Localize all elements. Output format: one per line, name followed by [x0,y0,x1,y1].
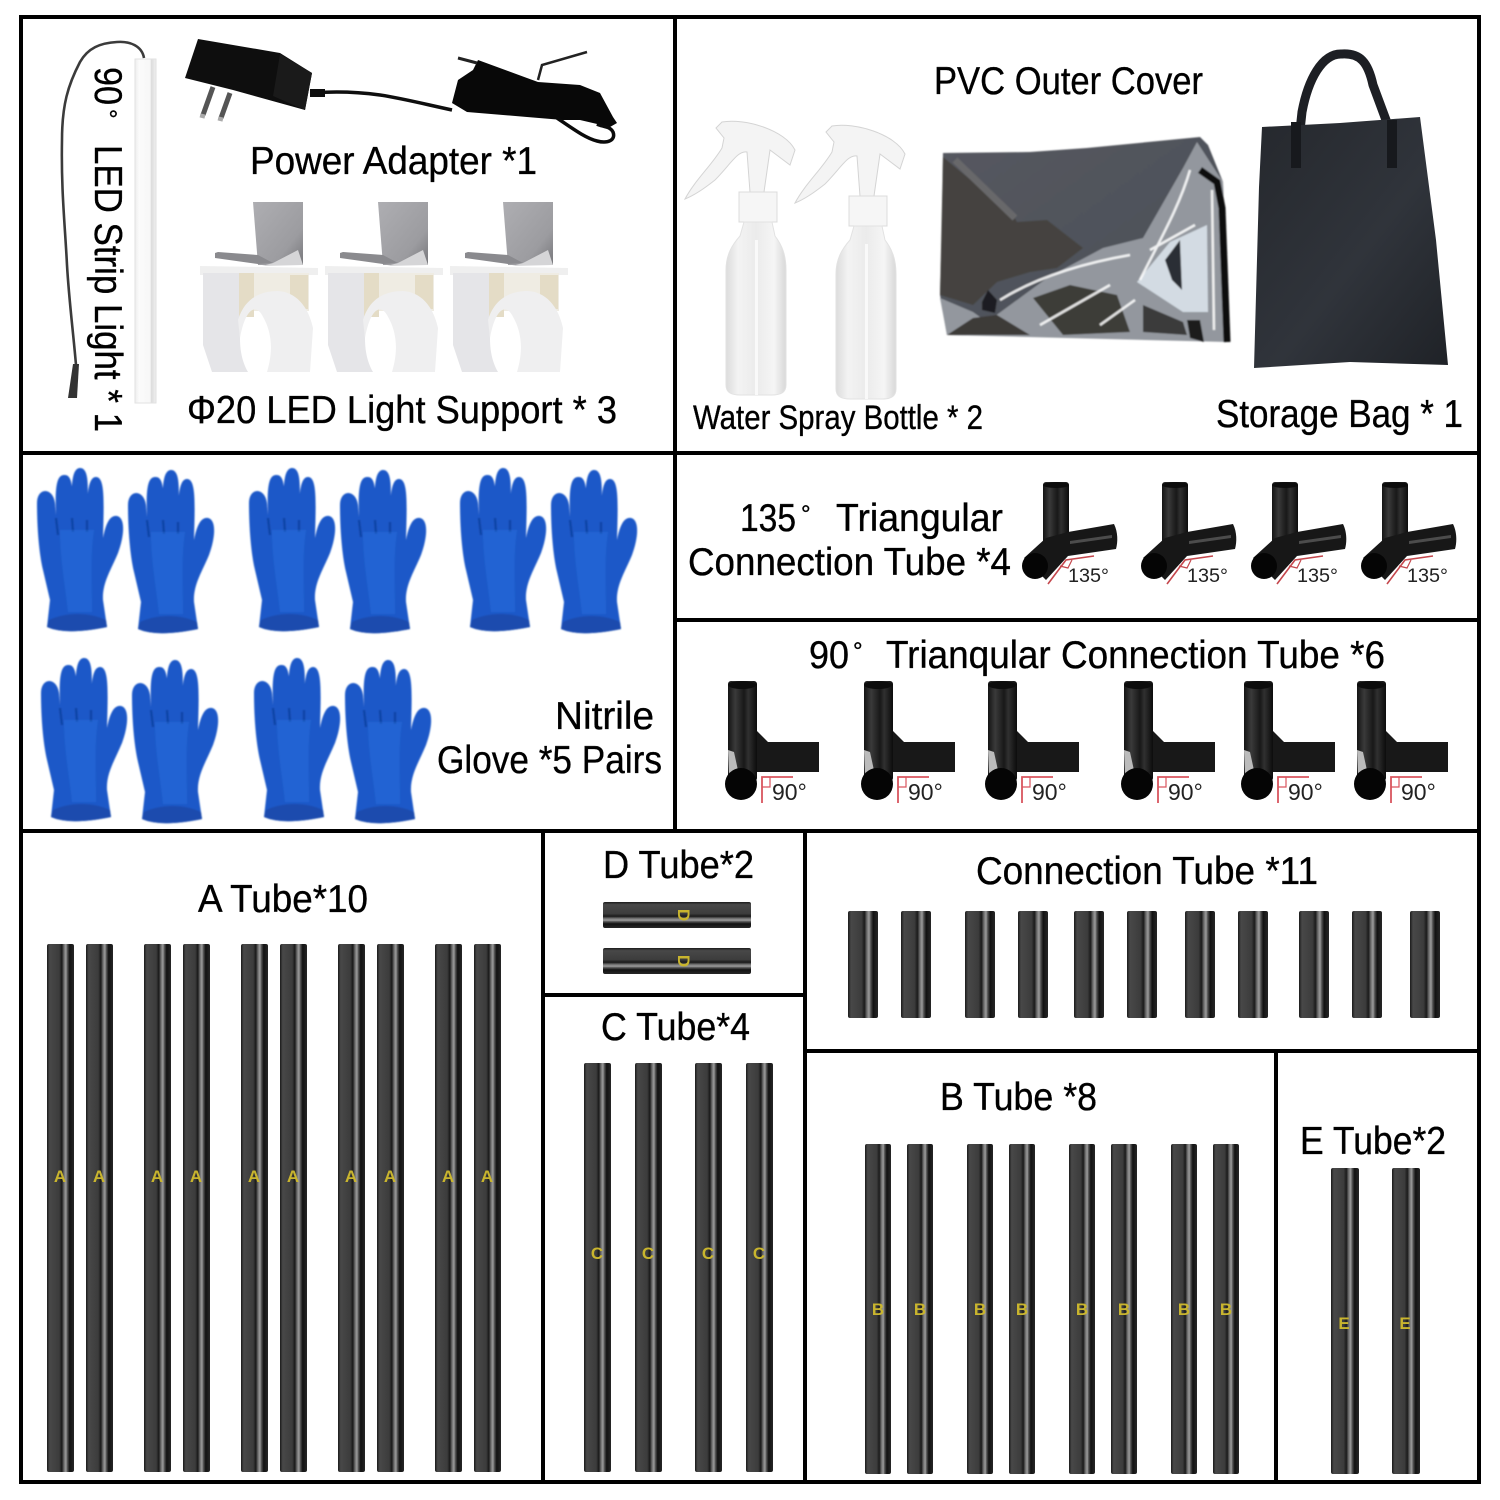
panel: D tubes [603,844,754,974]
icon: 90 connector 1 [725,681,819,805]
label: connection tube: Connection Tube *11 [976,850,1318,893]
icon: 90 connector 3 [985,681,1079,805]
icon: gloves row 2 pair 1 [41,658,218,823]
tubes: A tube set: A [384,1167,396,1186]
tubes: B tube set: B [1178,1300,1190,1319]
icon: 90 connector 2: 90° [908,779,943,805]
label: 135 degree connector: ° [801,501,811,528]
icon: 135 connector 1 [1022,482,1117,587]
panel: storage bag [1216,54,1463,436]
tubes: A tube set: A [248,1167,260,1186]
label: 90 degree connector: ° [853,638,863,665]
label: spray bottles: Water Spray Bottle * 2 [693,399,983,437]
icon: 135 connector 3 [1251,482,1346,587]
tubes: B tube set: B [1118,1300,1130,1319]
label: power adapter: Power Adapter *1 [250,140,537,183]
label: LED strip light: LED Strip Light * 1 [86,145,129,432]
panel: 90 degree connectors [725,634,1448,805]
icon: gloves row 2 pair 2 [254,658,431,823]
tubes: A tube set [47,944,501,1472]
icon: 90 connector 2 [861,681,955,805]
tubes: E tube set [1331,1168,1420,1474]
tubes: A tube set: A [345,1167,357,1186]
tubes: C tube set: C [753,1244,765,1263]
tubes: C tube set: C [702,1244,714,1263]
label: 135 degree connector [688,497,1011,584]
tubes: connection tube set [848,911,1440,1018]
tubes: C tube set: C [591,1244,603,1263]
icon: storage bag [1254,54,1448,368]
tubes: C tube set [584,1063,773,1472]
icon: 90 connector 6: 90° [1401,779,1436,805]
icon: light support 2 [325,202,443,372]
label: 135 degree connector: 135 [740,497,796,540]
label: A tube: A Tube*10 [198,878,368,921]
tubes: A tube set: A [442,1167,454,1186]
panel: E tubes [1300,1120,1446,1474]
panel: power adapter [185,39,617,183]
icon: 90 connector 4 [1121,681,1215,805]
panel: LED light supports [187,202,617,432]
label: 135 degree connector: Triangular [836,497,1003,540]
label: E tube: E Tube*2 [1300,1120,1446,1163]
label: nitrile gloves [437,695,662,782]
tubes: B tube set: B [1220,1300,1232,1319]
label: B tube: B Tube *8 [940,1076,1097,1119]
panel: 135 degree connectors [688,482,1456,587]
label: 135 degree connector: Connection Tube *4 [688,541,1011,584]
label: D tube: D Tube*2 [603,844,754,887]
label: LED strip light: 90 [86,67,129,105]
icon: light support 3 [450,202,568,372]
tubes: A tube set: A [287,1167,299,1186]
icon: spray bottle 2 [795,125,905,399]
panel: B tubes [865,1076,1239,1474]
tubes: D tube set: D [674,955,693,967]
icon: 135 connector 2: 135° [1187,566,1228,587]
panel: C tubes [584,1006,773,1472]
label: LED strip light: ° [94,109,121,119]
tubes: E tube set: E [1399,1314,1411,1333]
icon: 135 connector 3: 135° [1297,566,1338,587]
label: nitrile gloves: Nitrile [555,695,654,738]
icon: 135 connector 4 [1361,482,1456,587]
label: 90 degree connector: 90 [809,634,849,677]
panel: nitrile gloves [37,468,662,823]
label: storage bag: Storage Bag * 1 [1216,393,1463,436]
tubes: A tube set: A [190,1167,202,1186]
icon: light support 1 [200,202,318,372]
tubes: B tube set: B [914,1300,926,1319]
panel: PVC outer cover [934,60,1228,342]
label: 90 degree connector: Trianqular Connection Tube *6 [886,634,1385,677]
tubes: D tube set [603,902,751,974]
tubes: B tube set [865,1144,1239,1474]
tubes: B tube set: B [1016,1300,1028,1319]
tubes: C tube set: C [642,1244,654,1263]
icon: spray bottle 1 [685,121,795,395]
tubes: B tube set: B [974,1300,986,1319]
tubes: A tube set: A [481,1167,493,1186]
tubes: B tube set: B [1076,1300,1088,1319]
icon: 135 connector 4: 135° [1407,566,1448,587]
label: C tube: C Tube*4 [601,1006,750,1049]
icon: 90 connector 6 [1354,681,1448,805]
panel: LED strip light [62,42,156,432]
tubes: B tube set: B [872,1300,884,1319]
tubes: A tube set: A [54,1167,66,1186]
icon: 90 connector 4: 90° [1168,779,1203,805]
tubes: A tube set: A [151,1167,163,1186]
icon: PVC cover [940,137,1228,342]
icon: 135 connector 1: 135° [1068,566,1109,587]
icon: 90 connector 5 [1241,681,1335,805]
label: nitrile gloves: Glove *5 Pairs [437,739,662,782]
tubes: A tube set: A [93,1167,105,1186]
icon: gloves row 1 pair 3 [460,468,637,633]
icon: gloves row 1 pair 2 [249,468,426,633]
label: PVC outer cover: PVC Outer Cover [934,60,1203,103]
icon: power adapter [185,39,617,142]
icon: gloves row 1 pair 1 [37,468,214,633]
tubes: D tube set: D [674,909,693,921]
icon: 90 connector 3: 90° [1032,779,1067,805]
panel: A tubes [47,878,501,1472]
icon: LED strip and cable [62,42,156,403]
icon: 90 connector 1: 90° [772,779,807,805]
panel: spray bottles [685,121,983,437]
label: light support: Φ20 LED Light Support * 3 [187,389,617,432]
tubes: E tube set: E [1338,1314,1350,1333]
icon: 90 connector 5: 90° [1288,779,1323,805]
icon: 135 connector 2 [1141,482,1236,587]
panel: connection tubes [848,850,1440,1018]
